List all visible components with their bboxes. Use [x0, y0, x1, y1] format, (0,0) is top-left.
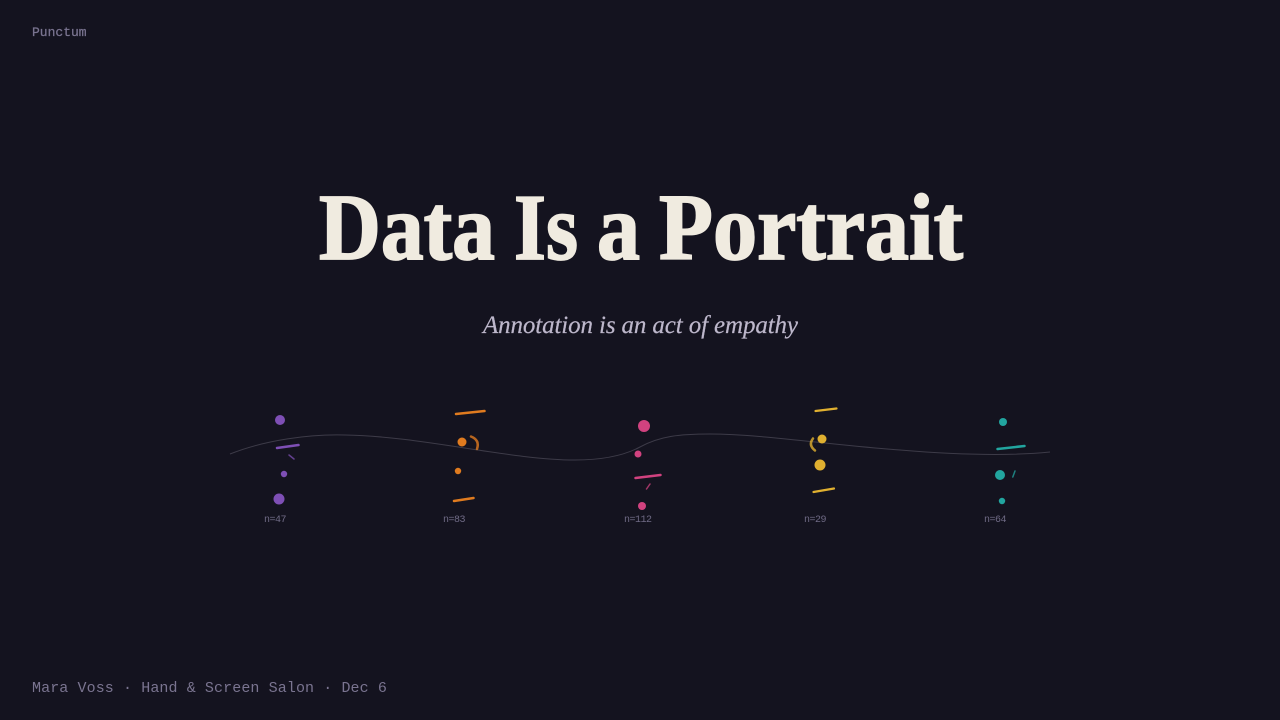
- group: purple n=47: [264, 415, 298, 526]
- footer: Mara Voss · Hand & Screen Salon · Dec 6: [32, 680, 387, 697]
- title: Is: [514, 176, 578, 280]
- chart: portrait data marks: [230, 408, 1050, 526]
- group: yellow n=29: n=29: [804, 515, 827, 526]
- group: yellow n=29: [804, 408, 836, 526]
- brand label: Punctum: [32, 25, 87, 40]
- group: pink n=112: [624, 420, 660, 526]
- timeline curve: [230, 434, 1050, 460]
- subtitle: Annotation is an act of empathy: [481, 312, 799, 339]
- title: [319, 176, 963, 280]
- title: Portrait: [659, 176, 963, 280]
- title: a: [597, 176, 640, 280]
- group: orange n=83: [443, 411, 484, 526]
- group: teal n=64: [984, 418, 1024, 526]
- title: Data: [319, 176, 495, 280]
- group: orange n=83: n=83: [443, 515, 466, 526]
- group: purple n=47: n=47: [264, 515, 287, 526]
- group: teal n=64: n=64: [984, 515, 1007, 526]
- group: pink n=112: n=112: [624, 515, 652, 526]
